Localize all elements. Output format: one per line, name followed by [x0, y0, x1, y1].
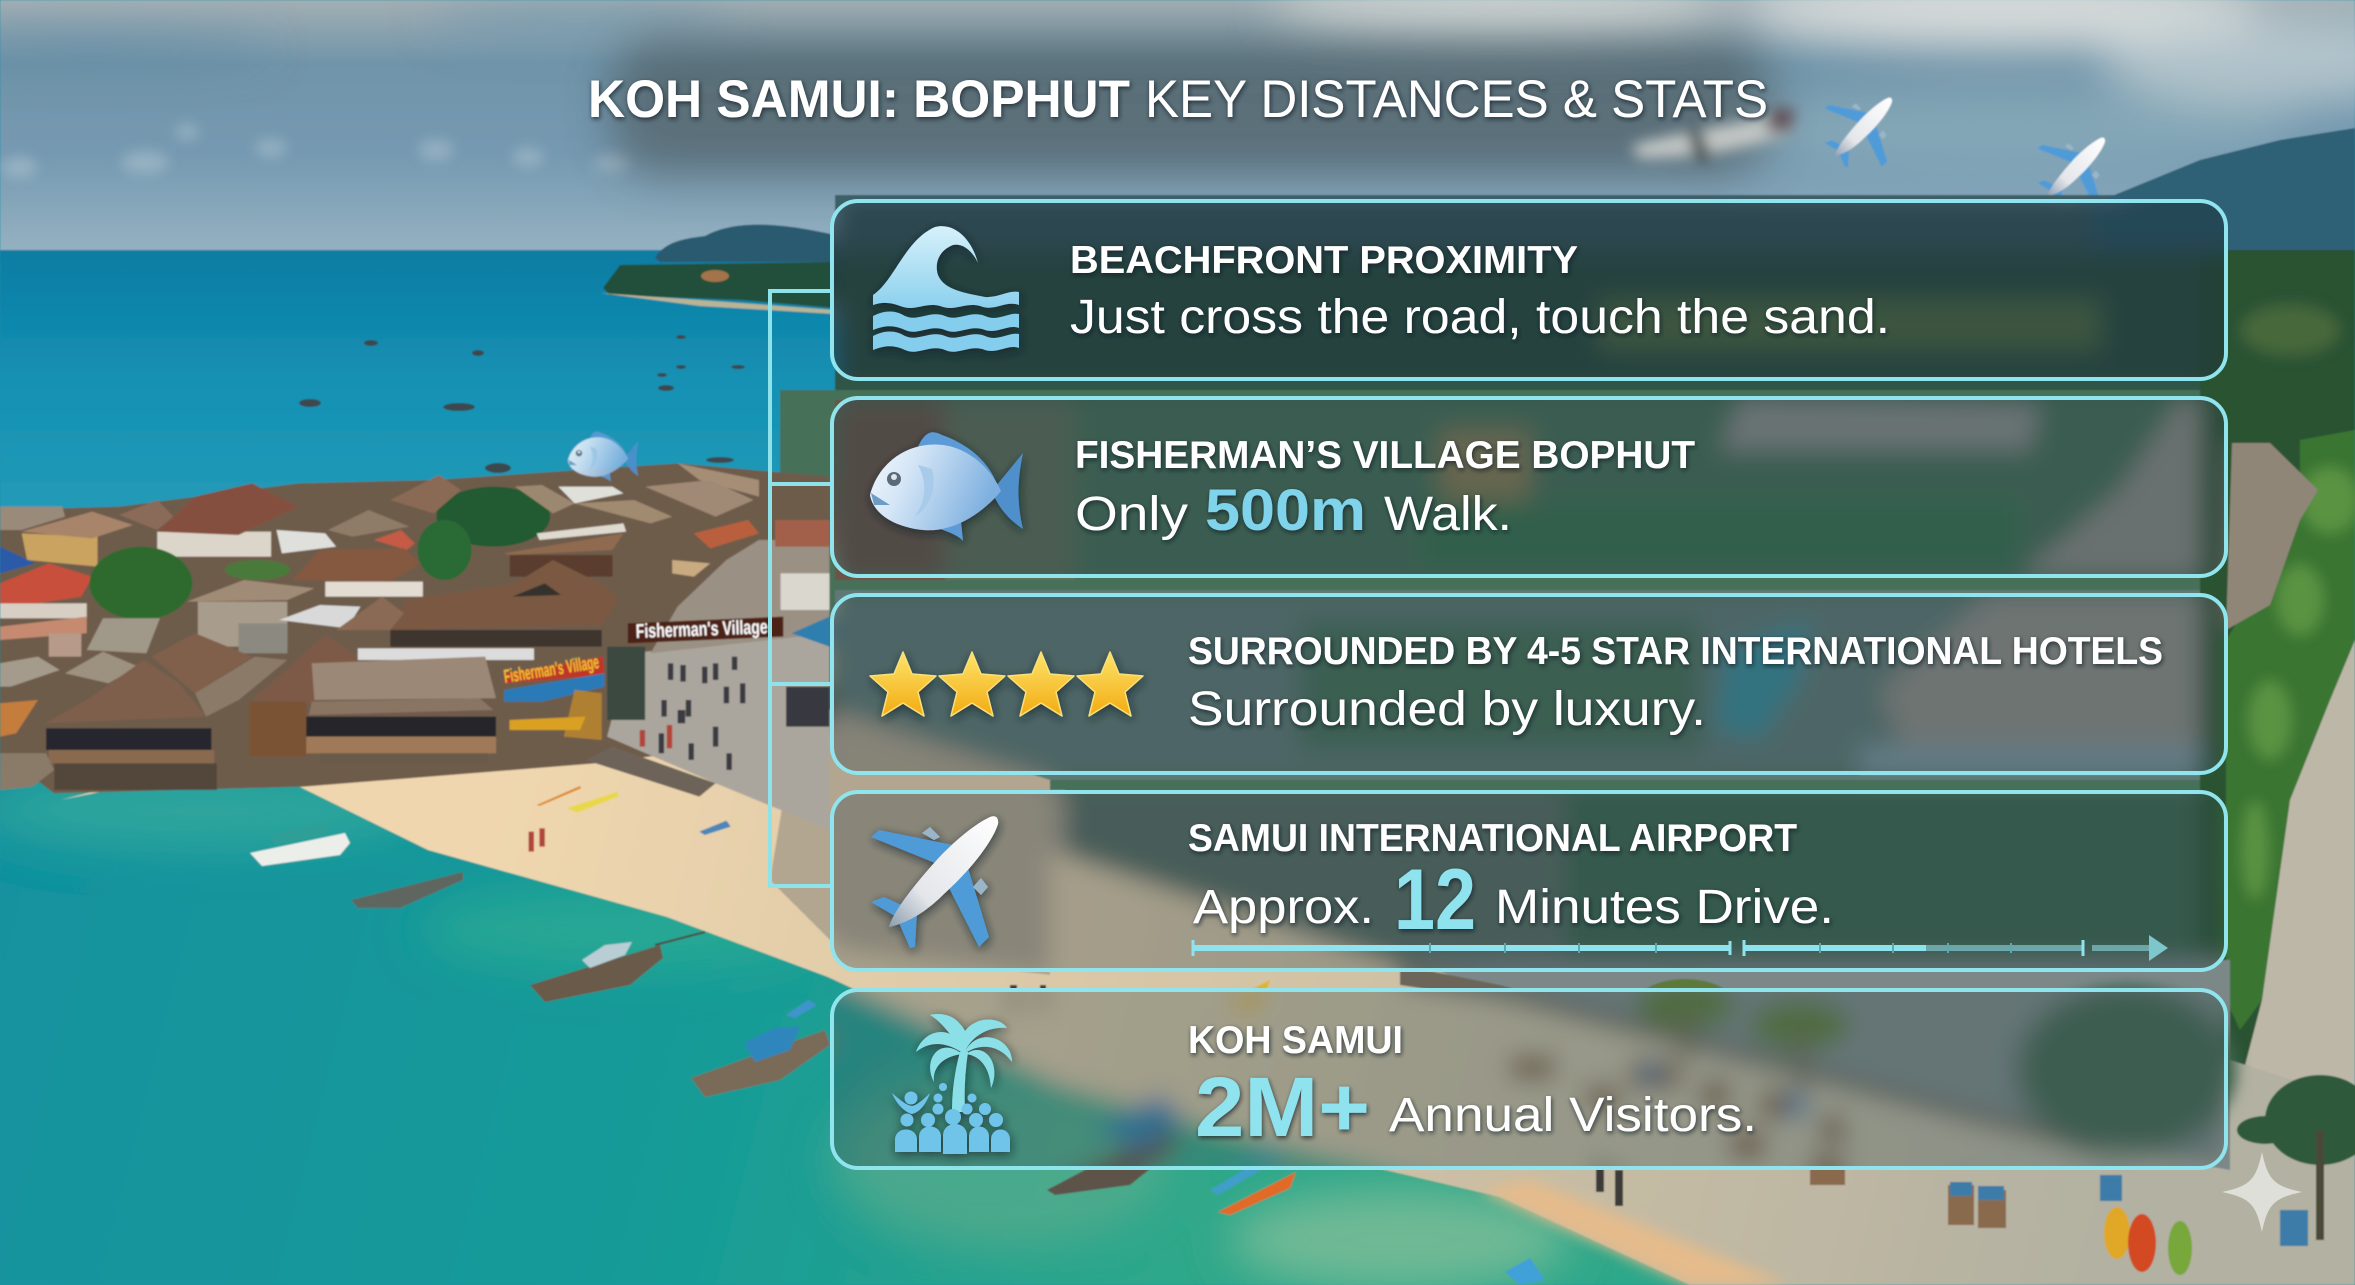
long tail boat 2 [530, 932, 705, 1002]
distant hills [2090, 128, 2355, 260]
sun loungers [1510, 1055, 2308, 1246]
distance text [1075, 478, 1512, 543]
small plane icon in sky [1825, 98, 1892, 167]
water tints [0, 770, 1570, 1285]
distance text: Walk. [1384, 488, 1512, 541]
heading: BEACHFRONT PROXIMITY [1070, 239, 1578, 282]
heading: SURROUNDED BY 4-5 STAR INTERNATIONAL HOTELS [1188, 630, 2163, 673]
title: KOH SAMUI: BOPHUT [588, 70, 1130, 129]
icon: fish [870, 432, 1023, 541]
inland resort greenery behind panels [780, 250, 2355, 970]
panel: Koh Samui visitors [832, 990, 2226, 1168]
right side hotel roof [2226, 443, 2318, 630]
orange wet sand along the shore [1480, 1180, 1790, 1285]
heading: SAMUI INTERNATIONAL AIRPORT [1188, 817, 1797, 860]
open sea [0, 250, 860, 790]
distance text: 500m [1205, 478, 1366, 543]
icon: airplane [871, 816, 998, 948]
palm trees on the beach [1635, 979, 2355, 1240]
right side forest [2200, 250, 2355, 1110]
sign: Fisherman's Village gate: Fisherman's Village [635, 616, 768, 643]
speed boat [250, 823, 350, 866]
title [588, 70, 1768, 129]
beach road strip [1400, 960, 2230, 1170]
icon: palm tree and crowd [892, 1014, 1012, 1154]
drive time text: 12 [1394, 852, 1476, 948]
sky [0, 0, 2355, 255]
kayaks at the shore [1210, 980, 1296, 1215]
second small plane icon in sky [2038, 138, 2105, 207]
description: Surrounded by luxury. [1188, 683, 1706, 736]
distant islands [600, 225, 835, 314]
kayaks on beach, right [2104, 1207, 2192, 1275]
visitors text [1195, 1060, 1757, 1154]
beach sand [60, 700, 2355, 1285]
distance text: Only [1075, 488, 1188, 541]
icon: four stars [870, 652, 1143, 716]
panel: airport [832, 792, 2226, 970]
village buildings [0, 463, 829, 852]
long tail boat 1 [351, 872, 463, 908]
heading: KOH SAMUI [1188, 1019, 1403, 1062]
title backdrop shade [610, 40, 1770, 175]
slate haze behind first panel [835, 195, 2135, 265]
clouds [0, 0, 2355, 170]
connector bracket [770, 291, 832, 886]
sea wall behind beach [1400, 965, 2100, 1156]
anchored boats [299, 335, 745, 473]
sign: Fisherman's Village shopfront: Fisherman's Village [502, 652, 601, 688]
small fish icon over sea [568, 432, 638, 482]
sparkle watermark [2222, 1152, 2302, 1232]
panel: beachfront proximity [832, 201, 2226, 379]
heading: FISHERMAN’S VILLAGE BOPHUT [1075, 434, 1695, 477]
street and upper sand under panels [770, 700, 1050, 975]
blue kayak at the waterline [1505, 1258, 1545, 1285]
right side road [2236, 640, 2355, 1150]
lagoon water [0, 770, 1800, 1285]
drive time text [1193, 852, 1834, 948]
visitors text: 2M+ [1195, 1060, 1370, 1154]
visitors text: Annual Visitors. [1389, 1089, 1757, 1142]
panel: Fisherman's Village [832, 398, 2226, 576]
drive time text: Minutes Drive. [1495, 881, 1834, 934]
small clouds [1, 124, 630, 177]
people on the beach [1010, 985, 1623, 1206]
description: Just cross the road, touch the sand. [1070, 291, 1890, 344]
distance timeline arrow [1193, 935, 2168, 961]
airliner photo [1632, 108, 1795, 160]
long tail boat 3 [691, 1000, 830, 1097]
frosted panel backdrop [834, 203, 2224, 1166]
title: KEY DISTANCES & STATS [1145, 70, 1768, 129]
icon: wave [873, 226, 1019, 352]
long tail boat 4 in panel [1047, 1095, 1185, 1195]
drive time text: Approx. [1193, 881, 1374, 934]
panel: 4-5 star hotels [832, 595, 2226, 773]
large palm shadow in panel [2017, 985, 2237, 1155]
